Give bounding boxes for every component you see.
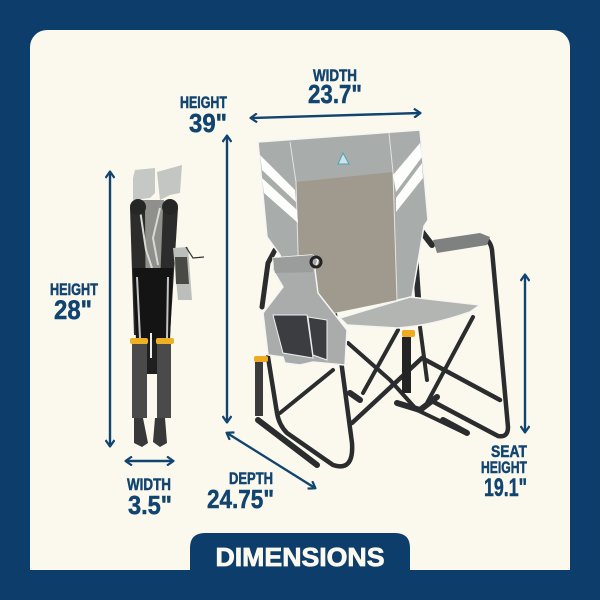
white stripes	[260, 143, 423, 223]
label: folded height	[50, 281, 98, 325]
label: folded width	[127, 476, 172, 520]
arrow: folded height	[109, 172, 111, 446]
label: seat height: 19.1"	[484, 474, 527, 502]
label: chair width: 23.7"	[308, 79, 362, 109]
arrow: folded width	[126, 460, 173, 462]
label: seat height	[481, 443, 527, 502]
label: folded width: 3.5"	[128, 490, 172, 520]
label: chair width: WIDTH	[313, 67, 357, 85]
frame: legs and rockers	[258, 232, 508, 466]
logo	[338, 153, 349, 164]
label: depth: 24.75"	[207, 484, 274, 514]
chair back	[258, 130, 428, 320]
heading: dimensions: DIMENSIONS	[216, 542, 384, 572]
left armrest and pocket organizer	[263, 255, 347, 365]
arrow: depth	[227, 433, 315, 488]
label: seat height: SEAT	[491, 443, 527, 461]
label: chair width	[308, 67, 362, 109]
label: chair height: 39"	[189, 108, 227, 138]
panel: dimensions tab	[190, 533, 410, 572]
arrow: chair height	[226, 136, 228, 422]
seams	[290, 133, 397, 320]
label: folded height: HEIGHT	[50, 281, 98, 299]
mesh pockets	[273, 315, 327, 360]
arrow: chair width	[251, 113, 420, 118]
label: depth: DEPTH	[229, 470, 273, 488]
label: folded height: 28"	[54, 295, 92, 325]
label: chair height: HEIGHT	[180, 94, 227, 112]
seat	[340, 297, 480, 328]
illustration: rocking chair	[254, 130, 508, 466]
illustration: folded chair	[130, 165, 204, 447]
label: seat height: HEIGHT	[481, 459, 527, 477]
arrow: seat height	[524, 275, 526, 432]
label: chair height	[180, 94, 227, 138]
label: depth	[207, 470, 274, 514]
right armrest	[433, 233, 490, 253]
label: folded width: WIDTH	[127, 476, 171, 494]
mesh panel	[296, 172, 397, 320]
